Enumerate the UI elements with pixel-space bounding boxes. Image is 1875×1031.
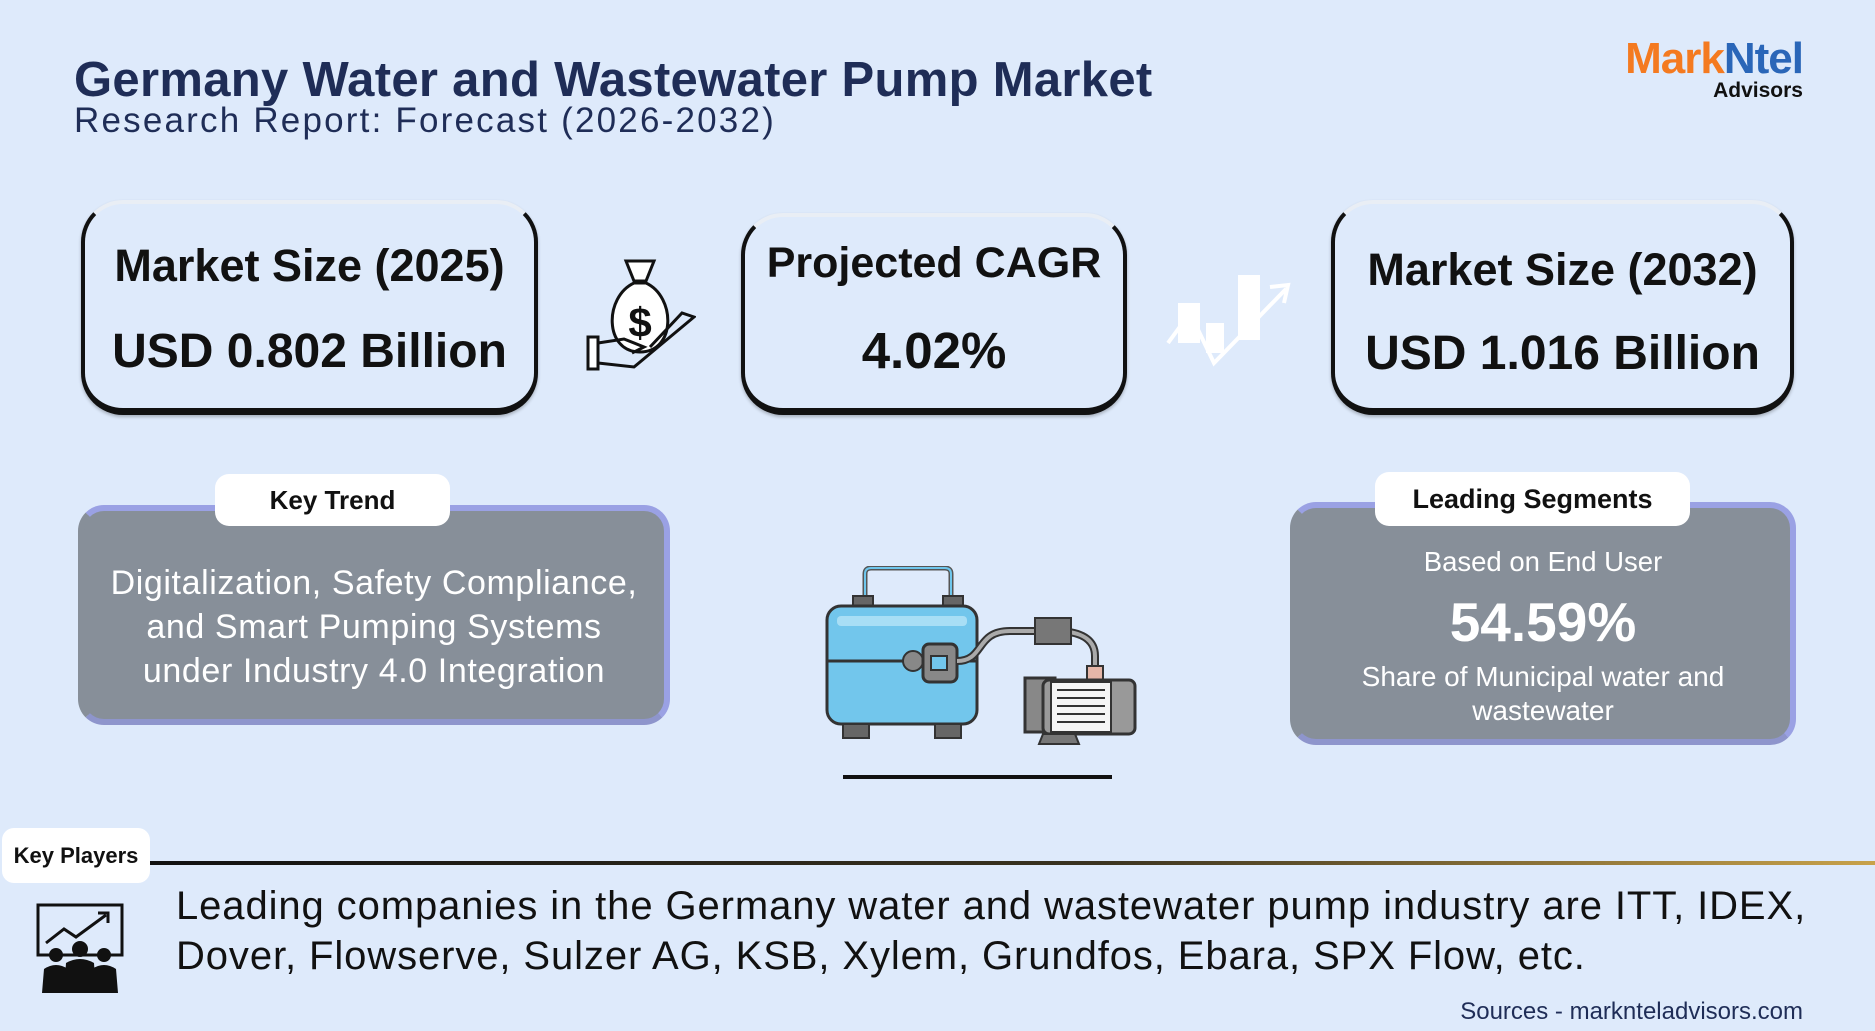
segment basis: Based on End User — [1424, 546, 1662, 577]
stat box: market size 2025 — [81, 200, 538, 415]
stat box: market size 2025: USD 0.802 Billion — [112, 325, 507, 378]
segment description — [1362, 661, 1724, 726]
trend text: Digitalization, Safety Compliance, — [111, 564, 637, 602]
stat box: projected CAGR: Projected CAGR — [767, 239, 1101, 287]
tab: key players: Key Players — [14, 843, 138, 868]
segment value: 54.59% — [1450, 591, 1636, 653]
key players text: Dover, Flowserve, Sulzer AG, KSB, Xylem, Grundfos, Ebara, SPX Flow, etc. — [176, 934, 1586, 978]
trend text — [111, 564, 637, 690]
key players text — [176, 884, 1806, 978]
subtitle: Research Report: Forecast (2026-2032) — [74, 101, 776, 140]
tab: key trend: Key Trend — [270, 485, 395, 515]
key players rule — [150, 861, 1875, 865]
panel: leading segments — [1290, 502, 1796, 745]
stat box: projected CAGR: 4.02% — [862, 322, 1006, 379]
segment description: Share of Municipal water and — [1362, 661, 1724, 692]
tab: leading segments: Leading Segments — [1412, 484, 1653, 514]
icon: money bag in hand: $ — [628, 299, 652, 346]
icon: money bag in hand — [586, 260, 696, 370]
trend text: and Smart Pumping Systems — [146, 608, 602, 646]
illustration: water pump — [826, 566, 1136, 745]
sources: Sources - marknteladvisors.com — [1460, 998, 1803, 1025]
tab: leading segments — [1375, 472, 1690, 526]
stat box: market size 2025: Market Size (2025) — [114, 240, 505, 291]
stat box: market size 2032 — [1331, 200, 1794, 415]
stat box: market size 2032: USD 1.016 Billion — [1365, 327, 1760, 380]
panel: key trend — [78, 505, 670, 725]
tab: key trend — [215, 474, 450, 526]
icon: growth chart — [1166, 275, 1290, 366]
stat box: projected CAGR — [741, 213, 1127, 415]
trend text: under Industry 4.0 Integration — [143, 652, 605, 690]
segment description: wastewater — [1472, 695, 1614, 726]
stat box: market size 2032: Market Size (2032) — [1367, 244, 1758, 295]
icon: team with chart — [36, 904, 124, 993]
divider under pump — [843, 775, 1112, 779]
title: Germany Water and Wastewater Pump Market — [74, 53, 1153, 107]
key players text: Leading companies in the Germany water and wastewater pump industry are ITT, IDEX, — [176, 884, 1806, 928]
logo: MarkNtel — [1625, 34, 1803, 83]
logo: Advisors — [1713, 79, 1803, 102]
tab: key players — [2, 828, 150, 883]
